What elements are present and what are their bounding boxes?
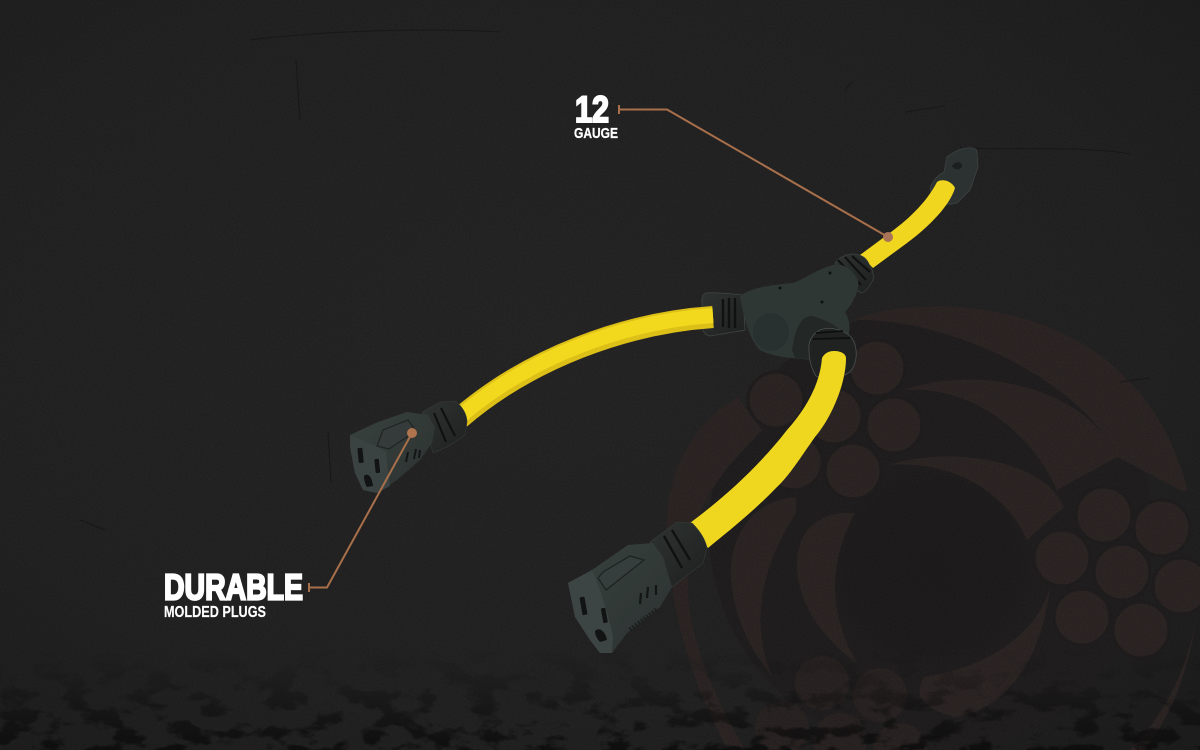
- emblem dark centre: [827, 463, 1035, 671]
- plug front face: [350, 435, 390, 493]
- strain relief: upper of junction: [835, 254, 873, 293]
- socket slots: [357, 448, 380, 487]
- product: Y-adapter cord: [350, 148, 978, 653]
- emblem strand circles: right cluster: [1034, 487, 1200, 658]
- plug top tab: [598, 556, 644, 590]
- junction round boss: [753, 313, 789, 351]
- callout heading: 12: 12: [575, 89, 609, 130]
- background: grime along bottom edge: [0, 688, 1200, 750]
- cable: left branch: [460, 316, 713, 418]
- male plug at end of upper branch: [930, 148, 978, 204]
- junction shaded notch: [792, 316, 838, 360]
- callout: 12 gauge: [574, 89, 893, 242]
- emblem strand circles: bottom cluster: [755, 656, 927, 750]
- socket plug: lower: [568, 522, 707, 653]
- emblem crescents: [667, 306, 1197, 750]
- strain relief: left of junction: [702, 293, 745, 336]
- callout subheading: molded plugs: MOLDED PLUGS: [164, 604, 266, 621]
- callout heading: durable: DURABLE: [164, 566, 303, 608]
- plug top tab: [377, 420, 416, 449]
- plug side grips: [406, 449, 420, 462]
- cable: upper branch: [860, 180, 955, 268]
- socket plug: left: [350, 401, 467, 493]
- plug body: [568, 543, 672, 653]
- strain relief: lower of junction: [809, 328, 856, 378]
- background emblem: spiral of cable strands: [667, 306, 1200, 750]
- junction body: [740, 265, 858, 360]
- junction mould pits: [778, 272, 832, 304]
- leader line to plug: [309, 428, 417, 592]
- plug strain relief: [422, 401, 467, 453]
- emblem strand circles: upper cluster: [748, 340, 922, 499]
- plug strain relief: [650, 522, 707, 587]
- callout subheading: gauge: GAUGE: [574, 125, 618, 142]
- plug body: [350, 412, 435, 493]
- emblem dark field behind crescents: [709, 308, 1153, 750]
- plug underside ribbing: [630, 609, 658, 630]
- socket slots: [579, 597, 608, 642]
- plug side grips: [640, 585, 656, 604]
- callout: durable molded plugs: [164, 428, 417, 621]
- cable: lower branch: [690, 351, 846, 548]
- plug front face: [568, 570, 613, 653]
- leader line to cable: [619, 105, 893, 242]
